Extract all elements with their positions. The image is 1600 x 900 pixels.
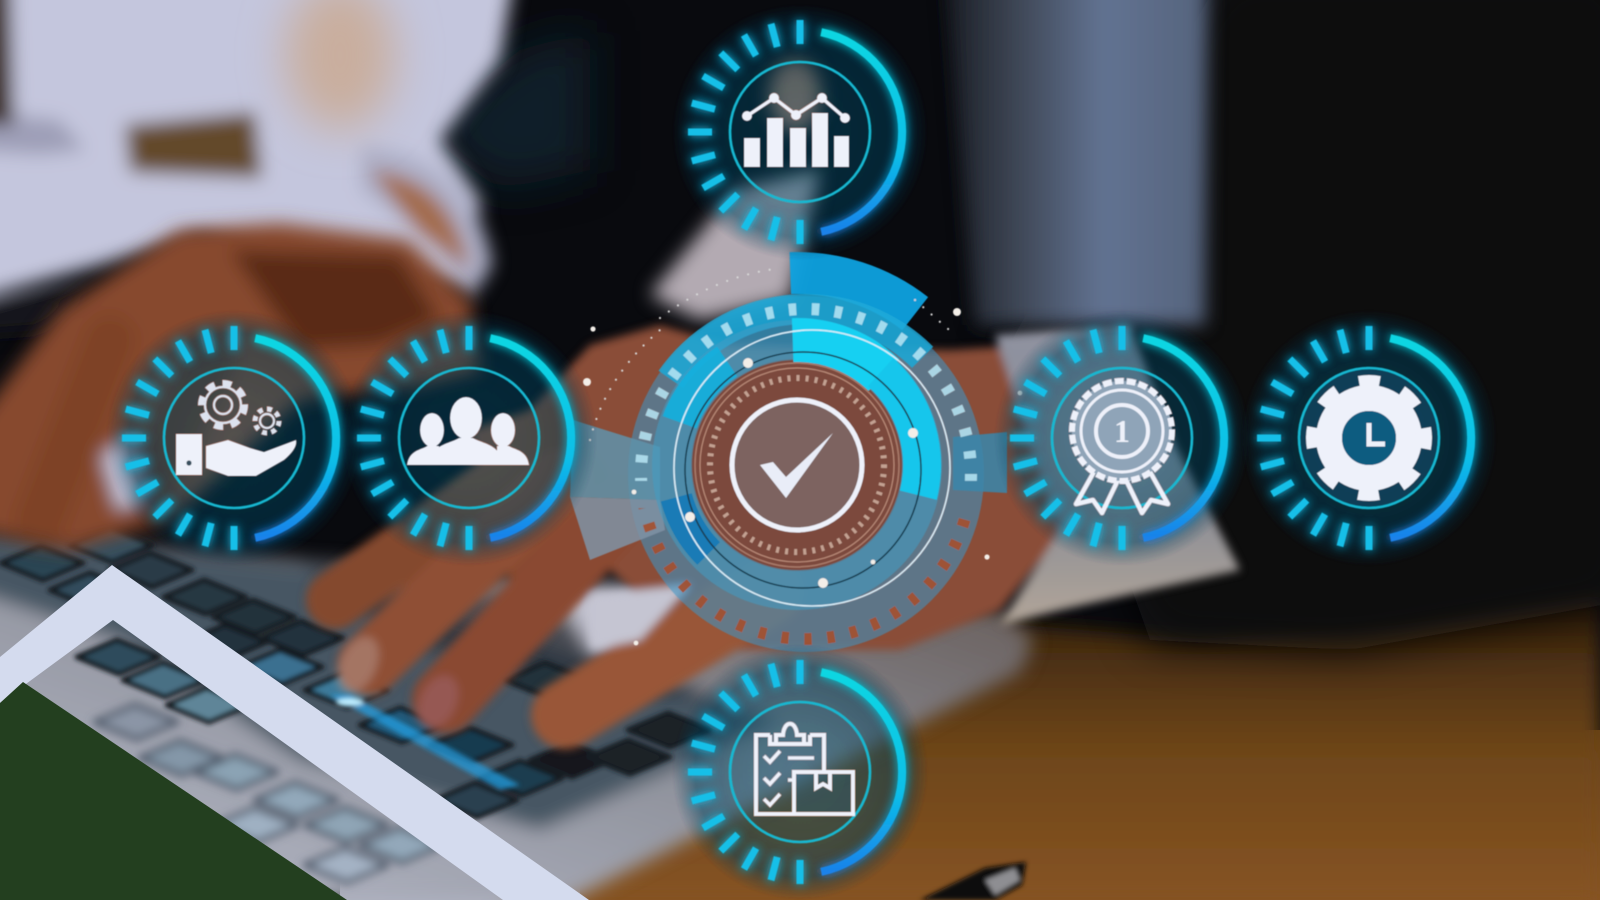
photo: keyboard keys (1, 528, 710, 817)
emblem: translucent base disc (628, 296, 984, 652)
emblem: brown core (691, 359, 903, 571)
emblem: fan blades and highlighted sectors (570, 244, 1036, 704)
emblem: node dots and sparkles (583, 308, 1022, 645)
icon: three people (407, 397, 529, 465)
photo: blurred foreground keys (95, 705, 442, 882)
icon: rosette badge with number one (1072, 381, 1172, 513)
emblem: white tick ring upper (634, 302, 978, 482)
icon: bar and line chart (742, 93, 850, 167)
icon: hand holding gears (176, 383, 296, 476)
emblem: check mark (760, 433, 833, 498)
photo: wooden desk (0, 570, 1600, 900)
dial: first place award (994, 310, 1250, 566)
photo: blue light streak on keyboard (330, 695, 520, 790)
icon: clipboard with box (756, 724, 853, 814)
photo: white sleeve and paper (0, 0, 515, 335)
photo: bottom and right edge colour strips (340, 730, 1600, 900)
dial: time settings gear (1241, 310, 1497, 566)
dial: checklist and package (672, 644, 928, 900)
dial: service hand with gears (106, 310, 362, 566)
emblem: dotted arcs (590, 269, 955, 440)
dial: analytics chart (672, 4, 928, 260)
corner block: dark green panel (0, 682, 347, 900)
emblem: brown tick ring lower (638, 508, 971, 646)
photo: shirt front (650, 0, 1208, 325)
dial: team of people (341, 310, 597, 566)
photo: beige background patch (285, 0, 395, 130)
photo: left hand (0, 223, 480, 550)
photo: centre hand and right hand (329, 325, 1240, 735)
central quality check emblem (570, 251, 1023, 652)
photo: laptop body (0, 530, 1034, 900)
text: award rank: 1 (1114, 413, 1130, 449)
photo: dark suit highlight (420, 0, 1600, 650)
emblem: check mark ring (732, 400, 862, 530)
emblem: thin rings (674, 330, 950, 606)
corner frame: white chevron band (0, 565, 589, 900)
photo: pen on desk (920, 862, 1026, 900)
icon: gear with clock (1305, 374, 1433, 502)
